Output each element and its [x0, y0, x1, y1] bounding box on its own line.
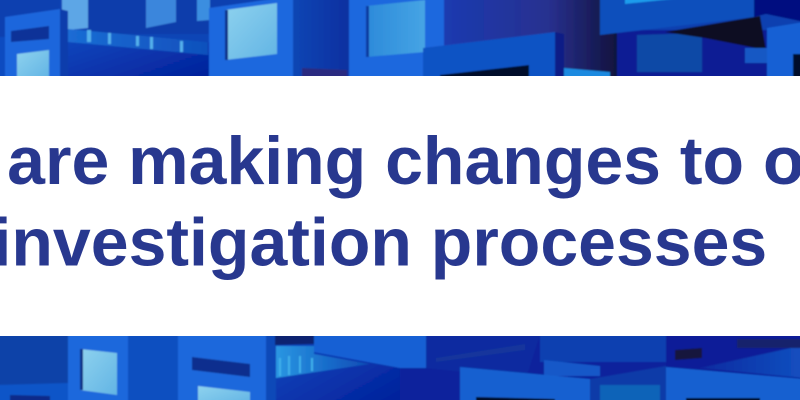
bottom centre drawer [178, 334, 276, 400]
upper right block [423, 0, 800, 78]
centre drawer [209, 0, 349, 78]
banner: top file-drawer image [0, 0, 800, 78]
white title band [0, 76, 800, 336]
bottom banner: file-drawer image [0, 334, 800, 400]
bottom right blocks [400, 334, 800, 400]
title line 2: investigation processes [0, 204, 767, 280]
left drawer [0, 9, 68, 78]
right drawer with blue window [349, 0, 444, 78]
title heading [0, 123, 800, 280]
bottom striped shelf [275, 334, 400, 400]
bottom left drawer [68, 334, 178, 400]
